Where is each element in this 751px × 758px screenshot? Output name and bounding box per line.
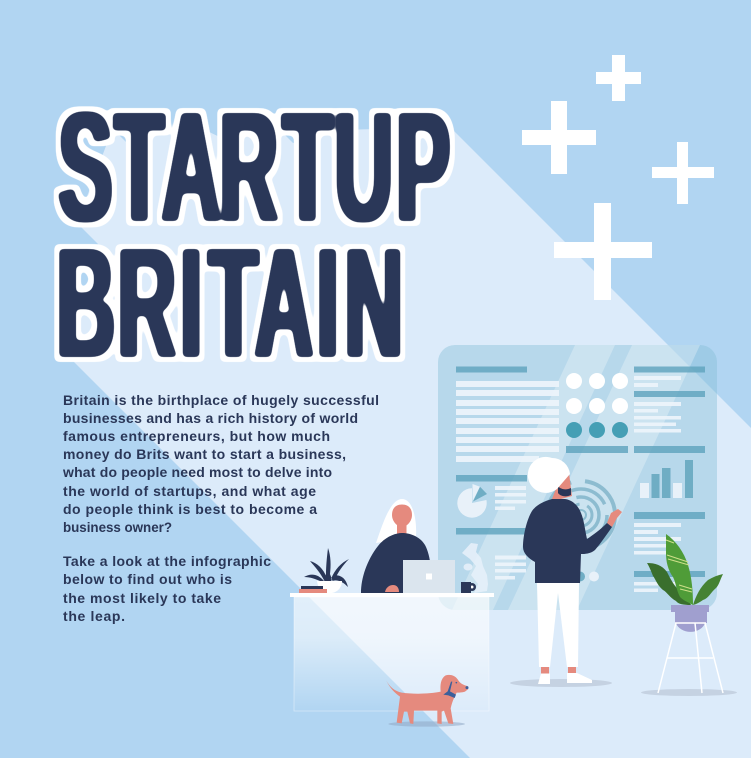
- intro text: what do people need most to delve into: [62, 464, 332, 480]
- title: STARTUP: [58, 79, 450, 255]
- plus signs: [522, 55, 714, 300]
- intro text: famous entrepreneurs, but how much: [63, 428, 330, 444]
- intro text: [62, 392, 379, 624]
- sweater: [523, 499, 612, 583]
- intro text: the leap.: [63, 608, 125, 624]
- teal header bars: [456, 366, 705, 577]
- man with turban: [510, 457, 622, 687]
- hair: [376, 499, 416, 543]
- beard: [558, 486, 571, 496]
- radial chart: [547, 481, 615, 549]
- plus 4: [554, 203, 652, 300]
- plus 2: [596, 55, 641, 101]
- intro text: below to find out who is: [63, 571, 232, 587]
- plus 3: [652, 142, 714, 204]
- text column left: [456, 381, 559, 462]
- desk items: [299, 548, 476, 593]
- eye: [455, 682, 457, 683]
- small dots: [575, 572, 585, 582]
- intro text: the world of startups, and what age: [63, 483, 316, 499]
- woman at desk: [361, 499, 455, 593]
- dot grid: [566, 373, 628, 414]
- neck: [397, 520, 406, 536]
- shoes: [538, 674, 550, 684]
- hand: [607, 509, 622, 527]
- shadow: [641, 689, 737, 696]
- head: [552, 473, 572, 499]
- shadow: [510, 679, 612, 687]
- collar: [443, 682, 456, 698]
- pie chart: [457, 484, 487, 518]
- leaf right: [693, 574, 723, 605]
- hand: [385, 585, 399, 592]
- laptop logo: [426, 574, 432, 580]
- face: [392, 504, 412, 527]
- stand: [658, 623, 723, 693]
- torso: [361, 533, 432, 593]
- intro text: businesses and has a rich history of world: [63, 410, 358, 426]
- body: [386, 675, 468, 724]
- long shadow: light diagonal band: [60, 127, 751, 758]
- map of the UK: [462, 543, 488, 593]
- books: [301, 586, 323, 590]
- intro text: do people think is best to become a: [63, 501, 317, 517]
- intro text: the most likely to take: [63, 590, 221, 606]
- plant on stand: [641, 534, 737, 696]
- intro text: money do Brits want to start a business,: [63, 446, 346, 462]
- mug: [461, 582, 476, 593]
- desk front: [294, 597, 489, 711]
- intro text: business owner?: [63, 520, 172, 535]
- intro text: Take a look at the infographic: [63, 553, 271, 569]
- desk top: [290, 593, 494, 597]
- intro text: Britain is the birthplace of hugely successful: [63, 392, 379, 408]
- socks: [541, 667, 549, 674]
- dashboard screen: [438, 345, 717, 610]
- leaf veins: [666, 540, 692, 592]
- dog: [386, 675, 468, 727]
- turban: [528, 457, 570, 493]
- plant leaves: [304, 548, 349, 587]
- leaf centre: [666, 534, 693, 605]
- small text lines: [495, 376, 681, 592]
- pot: [671, 605, 709, 632]
- title: BRITAIN: [56, 215, 403, 391]
- bar chart: [640, 460, 693, 498]
- plus 1: [522, 101, 596, 174]
- laptop: [403, 560, 455, 593]
- trousers: [537, 583, 579, 667]
- shadow: [388, 721, 465, 727]
- leaf left: [647, 563, 691, 605]
- nose: [465, 686, 468, 689]
- title: [56, 79, 450, 391]
- plant pot: [317, 581, 342, 593]
